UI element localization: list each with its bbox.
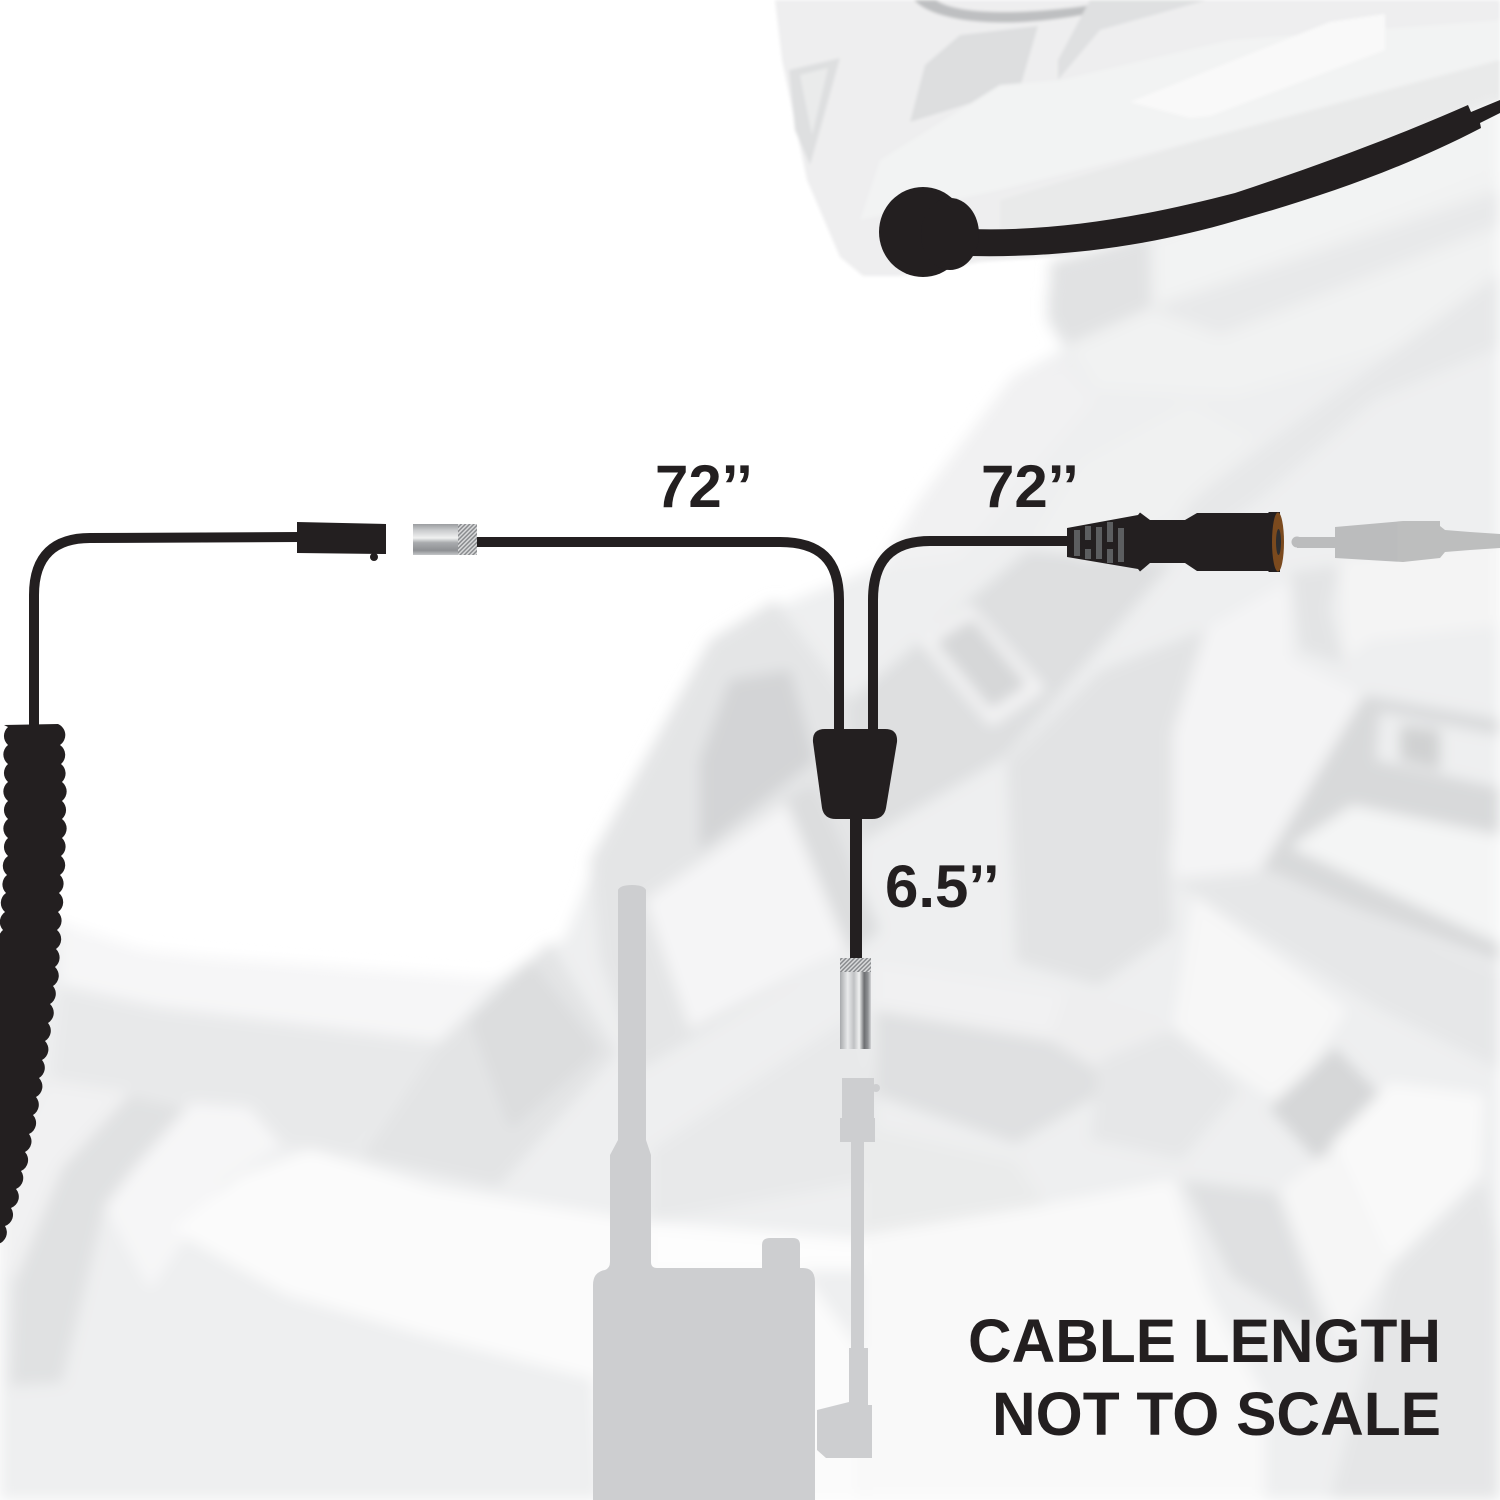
coiled cable xyxy=(0,724,67,1244)
buckle frame xyxy=(920,605,1045,726)
note: cable length not to scale: NOT TO SCALE xyxy=(992,1380,1441,1448)
right jack connector xyxy=(1067,512,1284,572)
note: cable length not to scale: CABLE LENGTH xyxy=(968,1307,1441,1375)
radio body and antenna xyxy=(593,885,815,1500)
ghost radio xyxy=(593,885,880,1500)
torso band and diagonal belt xyxy=(1173,273,1500,562)
arm xyxy=(172,1149,860,1500)
dark jacket region xyxy=(1007,629,1206,986)
label: 72 inch left: 72’’ xyxy=(655,453,753,520)
label: 6.5 inch: 6.5’’ xyxy=(885,853,1000,920)
label: 72 inch right: 72’’ xyxy=(981,453,1079,520)
note: cable length not to scale xyxy=(968,1307,1441,1448)
left inline connector xyxy=(297,522,386,561)
silver connector horizontal xyxy=(413,524,477,555)
silver connector vertical xyxy=(840,958,871,1049)
chest patch xyxy=(1260,695,1500,962)
collar xyxy=(1050,235,1152,350)
left chest straps and glove xyxy=(590,600,862,1070)
sleeve and shoulder xyxy=(1173,580,1364,895)
seat xyxy=(60,923,498,1042)
ghost headset plug xyxy=(1292,521,1500,562)
microphone boom xyxy=(879,100,1500,277)
ghost radio adapter cable xyxy=(817,1078,880,1458)
left pad and dark strap xyxy=(0,1080,129,1279)
Y splitter block xyxy=(813,729,897,819)
helmet xyxy=(775,0,1500,276)
sleeve stripes xyxy=(1173,895,1347,1108)
cables xyxy=(34,537,1070,962)
